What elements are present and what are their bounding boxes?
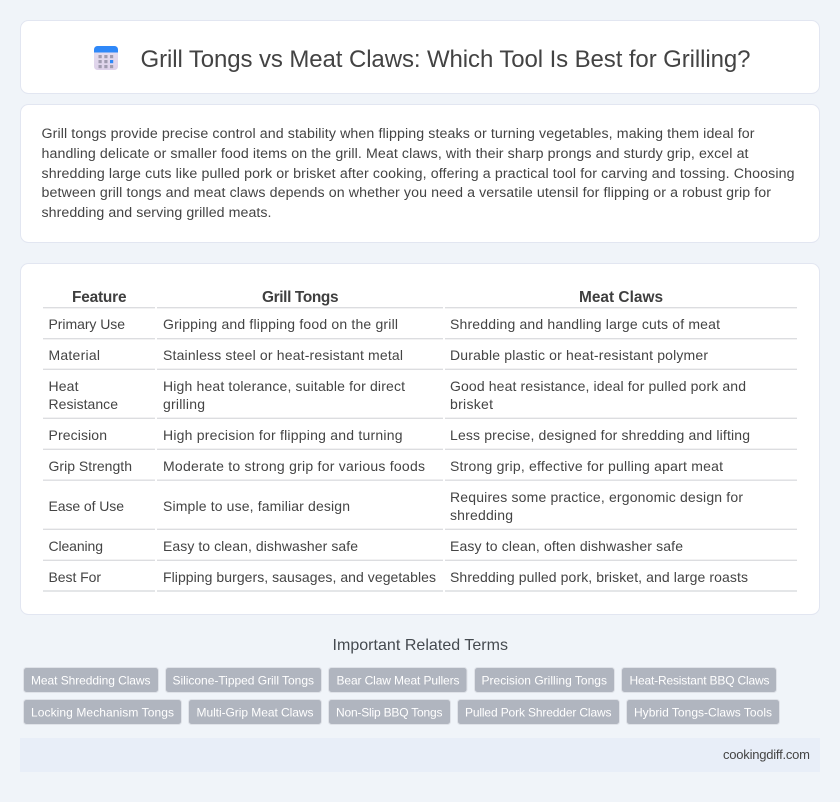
row: heat resistance: Heat (48, 378, 79, 394)
row: best for: Shredding pulled pork, brisket, and large roasts (450, 569, 748, 585)
footer (20, 738, 820, 772)
row: ease of use: Requires some practice, ergonomic design for (450, 489, 743, 505)
title: Grill Tongs vs Meat Claws: Which Tool Is Best for Grilling? (140, 46, 750, 73)
row: material: Material (48, 347, 100, 363)
tag: hybrid tongs-claws tools: Hybrid Tongs-Claws Tools (634, 705, 772, 719)
row: precision (43, 427, 797, 449)
row: best for: Best For (48, 569, 101, 585)
panel: introduction (20, 104, 820, 242)
text block: introduction paragraph: handling delicate or smaller food items on the grill. Meat claws, with their sharp prongs and sturdy grip, excel at (42, 146, 749, 162)
tag: hybrid tongs-claws tools (626, 700, 780, 724)
tag: locking mechanism tongs (24, 700, 182, 724)
row: heat resistance: Resistance (48, 396, 118, 412)
text block: introduction paragraph: Grill tongs provide precise control and stability when flipping steaks or turning vegetables, making them ideal for (42, 126, 755, 142)
row: primary use: Gripping and flipping food on the grill (163, 316, 398, 332)
row: heat resistance (43, 378, 797, 418)
row: grip strength: Grip Strength (48, 458, 132, 474)
table header: Meat Claws (579, 289, 663, 306)
row: grip strength: Strong grip, effective for pulling apart meat (450, 458, 723, 474)
tag: pulled pork shredder claws (458, 700, 620, 724)
row: material: Durable plastic or heat-resistant polymer (450, 347, 708, 363)
tag: silicone-tipped grill tongs: Silicone-Tipped Grill Tongs (172, 673, 314, 687)
row: primary use: Primary Use (48, 316, 125, 332)
tag: pulled pork shredder claws: Pulled Pork Shredder Claws (465, 705, 612, 719)
tag: non-slip bbq tongs: Non-Slip BBQ Tongs (336, 705, 442, 719)
row: material: Stainless steel or heat-resistant metal (163, 347, 403, 363)
tag: bear claw meat pullers: Bear Claw Meat Pullers (336, 673, 460, 687)
panel: related term tags (24, 668, 780, 724)
row: ease of use (43, 489, 797, 529)
row: primary use: Shredding and handling large cuts of meat (450, 316, 720, 332)
table header: Feature (72, 289, 127, 306)
row: precision: Less precise, designed for shredding and lifting (450, 427, 750, 443)
tag: heat-resistant bbq claws: Heat-Resistant BBQ Claws (630, 673, 770, 687)
footer source text: cookingdiff.com (723, 747, 810, 762)
tag: bear claw meat pullers (328, 668, 467, 692)
row: primary use (43, 316, 797, 339)
text block: introduction paragraph (42, 126, 794, 221)
row: best for: Flipping burgers, sausages, and vegetables (163, 569, 436, 585)
tag: precision grilling tongs (474, 668, 614, 692)
row: best for (43, 569, 797, 591)
tag: multi-grip meat claws: Multi-Grip Meat Claws (196, 705, 314, 719)
row: heat resistance: Good heat resistance, ideal for pulled pork and (450, 378, 746, 394)
tag: meat shredding claws (24, 668, 158, 692)
row: cleaning (43, 538, 797, 560)
row: heat resistance: grilling (163, 396, 205, 412)
tag: multi-grip meat claws (188, 700, 322, 724)
heading: important related terms: Important Related Terms (332, 637, 508, 654)
row: ease of use: Ease of Use (48, 498, 124, 514)
tag: heat-resistant bbq claws (622, 668, 776, 692)
row: heat resistance: brisket (450, 396, 493, 412)
tag: precision grilling tongs: Precision Grilling Tongs (482, 673, 607, 687)
row: material (43, 347, 797, 369)
panel: header (20, 20, 820, 94)
icon: calendar (94, 46, 118, 70)
tag: meat shredding claws: Meat Shredding Claws (31, 673, 150, 687)
row: precision: Precision (48, 427, 107, 443)
row: cleaning: Cleaning (48, 538, 103, 554)
table header: Grill Tongs (262, 289, 338, 306)
tag: locking mechanism tongs: Locking Mechanism Tongs (31, 705, 174, 719)
text block: introduction paragraph: shredding large cuts like pulled pork or brisket after cooking, offering a practical tool for carving and tossing. Choosing (42, 166, 794, 182)
table header (43, 289, 797, 308)
text block: introduction paragraph: between grill tongs and meat claws depends on whether you need a versatile utensil for flipping or a robust grip for (42, 185, 771, 201)
tag: non-slip bbq tongs (328, 700, 450, 724)
row: ease of use: shredding (450, 507, 513, 523)
row: ease of use: Simple to use, familiar design (163, 498, 350, 514)
text block: introduction paragraph: shredding and serving grilled meats. (42, 205, 272, 221)
row: grip strength: Moderate to strong grip for various foods (163, 458, 425, 474)
panel: comparison table (20, 264, 820, 614)
row: cleaning: Easy to clean, dishwasher safe (163, 538, 358, 554)
row: cleaning: Easy to clean, often dishwasher safe (450, 538, 683, 554)
tag: silicone-tipped grill tongs (166, 668, 322, 692)
row: heat resistance: High heat tolerance, suitable for direct (163, 378, 405, 394)
row: precision: High precision for flipping and turning (163, 427, 402, 443)
row: grip strength (43, 458, 797, 480)
